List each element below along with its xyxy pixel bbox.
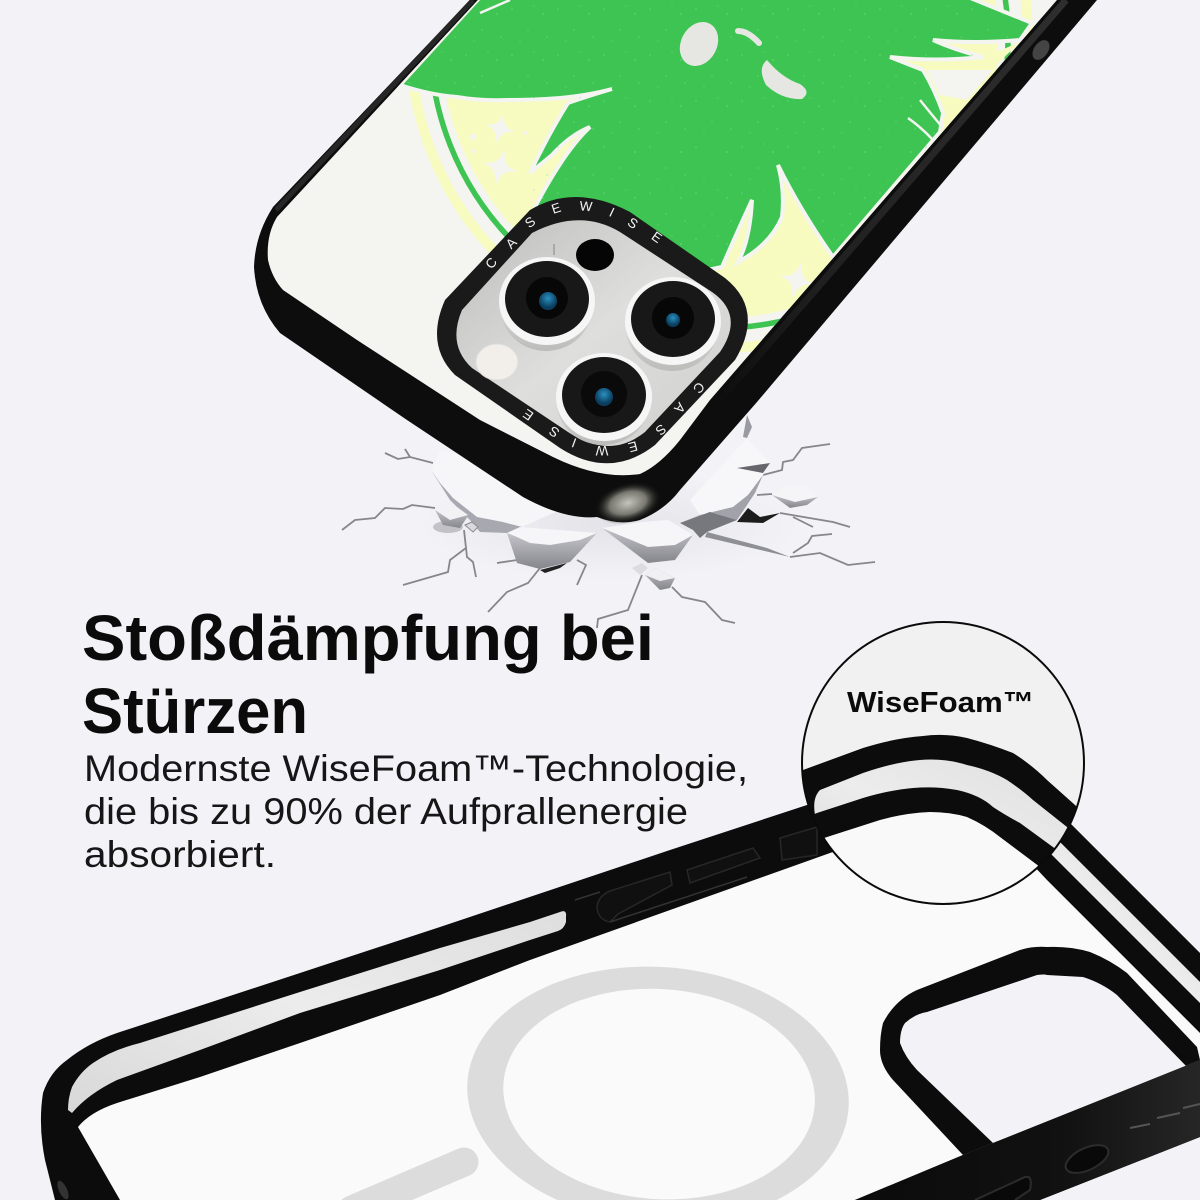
magnifier outline — [802, 622, 1084, 904]
small rocks bottom — [632, 563, 675, 590]
lens 1 — [499, 257, 595, 351]
yellow outer ring — [410, 0, 1028, 348]
case edge sheen — [716, 0, 1066, 404]
small rock right — [772, 485, 818, 508]
foam strip — [814, 760, 1068, 848]
module ring — [437, 197, 748, 463]
CASEWISE lettering upper: S — [522, 214, 538, 231]
CASEWISE lettering lower: S — [653, 421, 669, 438]
case frame — [41, 760, 1200, 1200]
green ring — [430, 0, 1008, 328]
headline: Stoßdämpfung bei — [82, 602, 654, 674]
CASEWISE lettering lower: S — [546, 423, 562, 440]
camera module — [437, 197, 748, 463]
case outer frame — [254, 0, 1097, 522]
band hairlines — [575, 877, 747, 922]
CASEWISE lettering lower: C — [690, 379, 708, 397]
magnifier label: WiseFoam™ — [847, 687, 1034, 719]
green speckle — [408, 6, 1008, 261]
lens 2 — [625, 277, 721, 371]
printed artwork — [400, 0, 1032, 348]
white slivers — [480, 0, 943, 140]
lidar — [576, 239, 614, 271]
star 2 — [484, 151, 516, 184]
small rock left — [433, 507, 478, 533]
back panel — [268, 0, 1057, 475]
case gloss highlight — [590, 475, 666, 531]
star 1 — [487, 115, 513, 142]
camera window — [900, 974, 1188, 1143]
clear back panel — [78, 810, 1200, 1200]
body copy — [84, 748, 748, 875]
CASEWISE lettering lower: A — [671, 400, 688, 416]
lower right band — [855, 1060, 1200, 1200]
star dots — [470, 131, 527, 153]
CASEWISE lettering upper — [482, 198, 665, 272]
bottom case interior — [41, 760, 1200, 1200]
magnifier disc — [802, 622, 1084, 904]
yellow disc — [440, 0, 998, 318]
body copy: die bis zu 90% der Aufprallenergie — [84, 791, 688, 832]
headline — [82, 602, 654, 747]
body copy: Modernste WiseFoam™-Technologie, — [84, 748, 748, 789]
white patch in the artwork — [927, 70, 993, 100]
crack lines — [342, 444, 875, 628]
yellow wedge right — [996, 42, 1020, 64]
case edge sheen left — [276, 0, 473, 210]
CASEWISE lettering upper: E — [549, 200, 563, 217]
CASEWISE lettering lower: I — [570, 435, 578, 450]
left slab surface — [431, 450, 560, 527]
camera cut-out — [880, 947, 1200, 1155]
rock centre left — [507, 527, 597, 573]
green character — [400, 0, 1032, 300]
left slab side — [431, 470, 522, 533]
star 3 — [781, 263, 812, 297]
headline: Stürzen — [82, 675, 308, 747]
body copy: absorbiert. — [84, 834, 276, 875]
side button — [1029, 37, 1053, 63]
CASEWISE lettering upper: S — [625, 215, 641, 232]
magsafe alignment pill — [352, 1162, 464, 1200]
cracked ground impact — [342, 415, 875, 628]
right slab — [680, 415, 790, 557]
CASEWISE lettering lower: W — [595, 443, 608, 458]
CASEWISE lettering lower: E — [627, 438, 639, 455]
flash — [476, 344, 518, 380]
clear panel — [824, 812, 1038, 903]
left gray strip — [68, 911, 566, 1113]
port details — [55, 1139, 1112, 1200]
magnified corner — [803, 734, 1076, 866]
character brow — [738, 31, 759, 43]
top phone with case — [254, 0, 1097, 531]
character mouth — [762, 60, 807, 99]
CASEWISE lettering lower — [520, 379, 708, 458]
microphone dot — [553, 244, 555, 255]
WiseFoam magnifier — [801, 621, 1085, 905]
outer black band — [803, 734, 1076, 828]
right gray strip — [1040, 842, 1200, 1003]
CASEWISE lettering upper: C — [482, 255, 500, 272]
band highlights — [1130, 1104, 1200, 1128]
CASEWISE lettering upper: E — [649, 229, 665, 246]
lens 3 — [556, 353, 652, 445]
CASEWISE lettering upper: A — [503, 235, 520, 252]
camera plate — [456, 220, 731, 446]
volume buttons — [597, 827, 817, 922]
CASEWISE lettering upper: I — [607, 205, 617, 220]
CASEWISE lettering upper: W — [579, 198, 593, 214]
inner black band — [814, 787, 1054, 866]
magsafe ring — [459, 954, 857, 1200]
CASEWISE lettering lower: E — [520, 406, 536, 423]
rock centre right — [602, 520, 693, 563]
character eye — [680, 22, 718, 66]
